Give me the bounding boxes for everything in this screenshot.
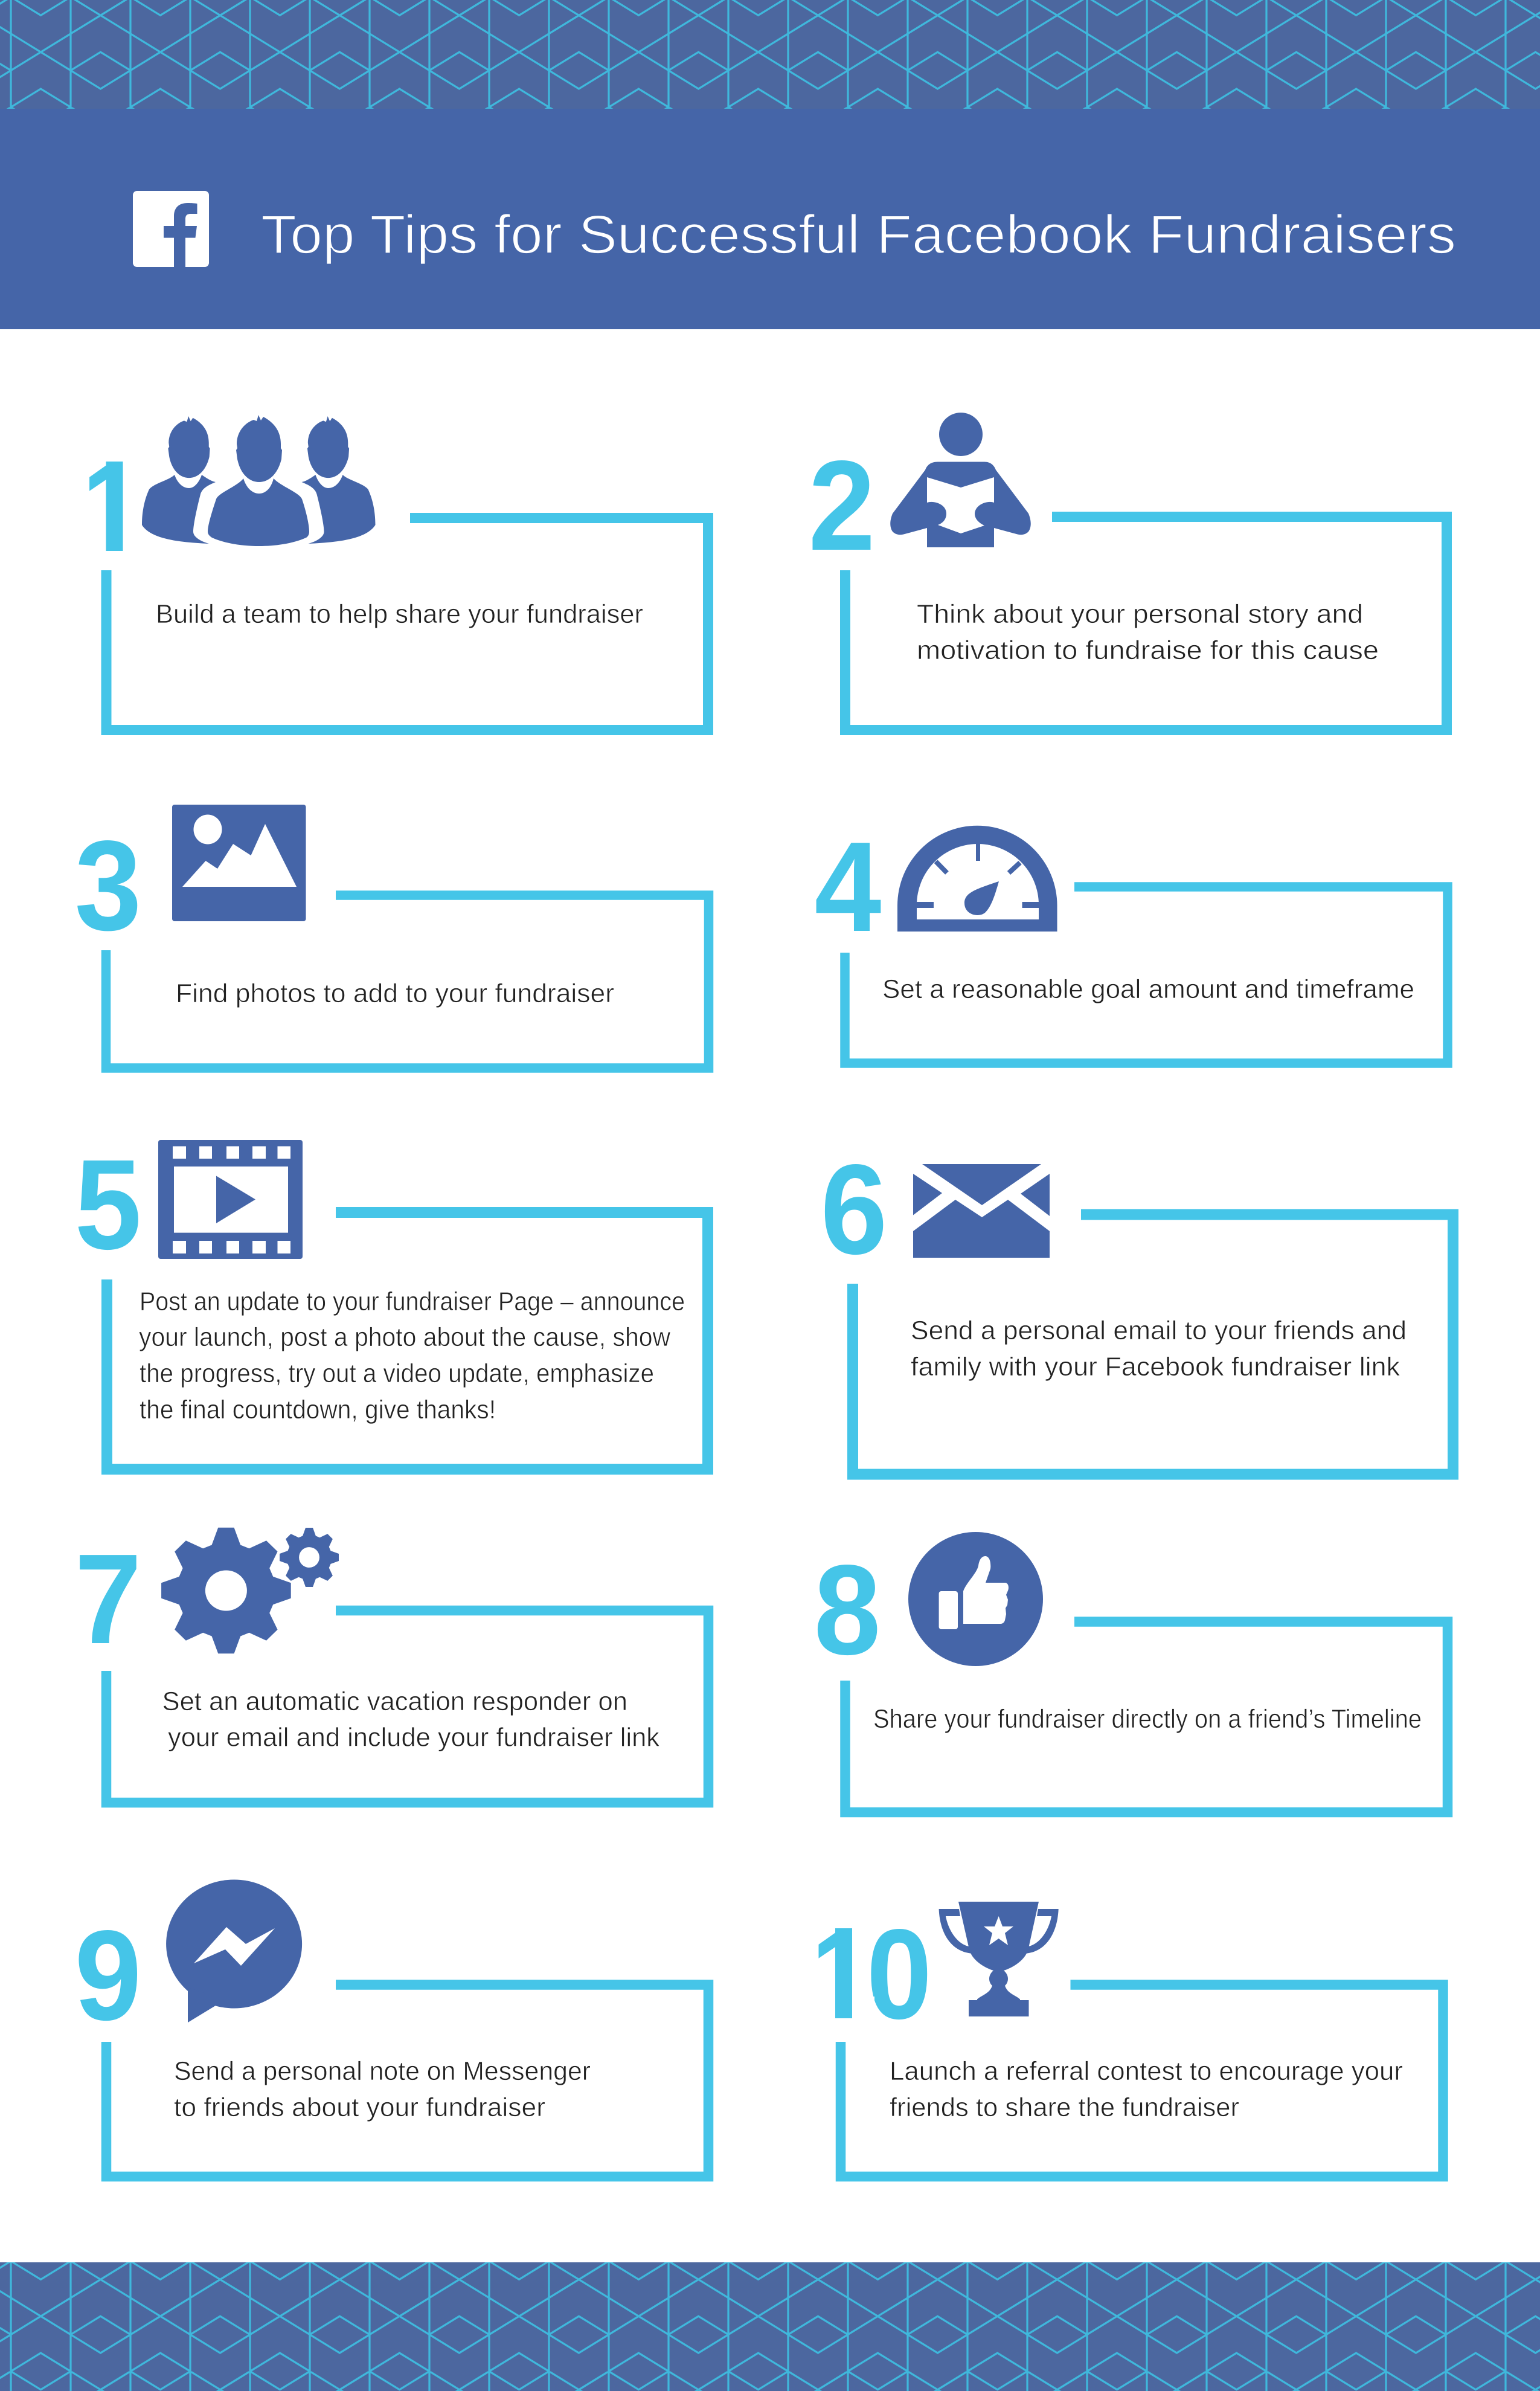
frame 2 [845, 517, 1447, 730]
icon: video film [158, 1140, 303, 1259]
text 5: your launch, post a photo about the cause, show [139, 1322, 670, 1352]
text 6 [911, 1316, 1407, 1382]
panel: tip 7 [75, 1527, 708, 1803]
icon: gears [161, 1528, 339, 1653]
number 4: 4 [815, 815, 881, 958]
panel: tip 3 [75, 805, 709, 1068]
text 2 [917, 599, 1379, 665]
frame 4 [845, 887, 1448, 1063]
text 10 [890, 2056, 1403, 2122]
text 6: Send a personal email to your friends and [911, 1316, 1407, 1345]
number 10: 10 [810, 1903, 932, 2046]
text 5: Post an update to your fundraiser Page – announce [140, 1287, 685, 1316]
text 1: Build a team to help share your fundraiser [156, 599, 643, 629]
text 5: the progress, try out a video update, emphasize [140, 1359, 654, 1388]
icon: photo [172, 805, 306, 921]
panel: tip 2 [809, 413, 1447, 730]
frame 3 [106, 895, 709, 1068]
text 3: Find photos to add to your fundraiser [176, 979, 614, 1008]
frame 10 [841, 1985, 1443, 2177]
header band [0, 0, 1540, 329]
icon: thumbs up [908, 1532, 1043, 1666]
panel: tip 9 [75, 1880, 708, 2177]
frame 9 [106, 1985, 708, 2177]
frame 8 [845, 1621, 1448, 1812]
number 6: 6 [821, 1138, 887, 1281]
icon: person reading [890, 413, 1031, 547]
frame 7 [106, 1611, 708, 1803]
number 3: 3 [75, 814, 141, 957]
title: Top Tips for Successful Facebook Fundraisers [261, 205, 1456, 265]
panel: tip 8 [814, 1532, 1448, 1812]
number 1: 1 [82, 436, 147, 579]
number 5: 5 [75, 1133, 141, 1276]
icon: trophy [939, 1902, 1059, 2016]
text 10: friends to share the fundraiser [890, 2093, 1239, 2122]
number 1 [89, 462, 123, 551]
number 7: 7 [75, 1527, 141, 1670]
panel: tip 10 [810, 1902, 1443, 2177]
frame 6 [853, 1214, 1453, 1474]
text 2: Think about your personal story and [917, 599, 1363, 629]
number 10 [819, 1928, 928, 2020]
text 4: Set a reasonable goal amount and timeframe [882, 974, 1414, 1004]
icon: team [142, 415, 376, 546]
text 2: motivation to fundraise for this cause [917, 636, 1379, 665]
text 7 [162, 1687, 660, 1752]
text 5 [139, 1287, 685, 1424]
frame 5 [107, 1212, 708, 1469]
icon: facebook logo [133, 191, 209, 267]
text 5: the final countdown, give thanks! [140, 1395, 496, 1424]
number 9: 9 [75, 1903, 141, 2047]
footer band [0, 2262, 1540, 2391]
icon: messenger [166, 1880, 302, 2023]
panel: tip 5 [75, 1133, 708, 1469]
text 9: Send a personal note on Messenger [174, 2056, 591, 2086]
panel: tip 1 [82, 415, 708, 730]
text 10: Launch a referral contest to encourage your [890, 2056, 1403, 2086]
text 6: family with your Facebook fundraiser link [911, 1352, 1400, 1382]
icon: gauge [897, 826, 1057, 932]
number 2: 2 [809, 434, 875, 577]
text 7: Set an automatic vacation responder on [162, 1687, 627, 1716]
panel: tip 4 [815, 815, 1448, 1063]
number 8: 8 [814, 1538, 881, 1681]
text 9 [174, 2056, 591, 2122]
icon: envelope [913, 1164, 1050, 1258]
panel: tip 6 [821, 1138, 1453, 1474]
text 8: Share your fundraiser directly on a friend’s Timeline [873, 1704, 1422, 1734]
text 9: to friends about your fundraiser [174, 2093, 545, 2122]
frame 1 [106, 518, 708, 730]
text 7: your email and include your fundraiser link [168, 1723, 660, 1752]
